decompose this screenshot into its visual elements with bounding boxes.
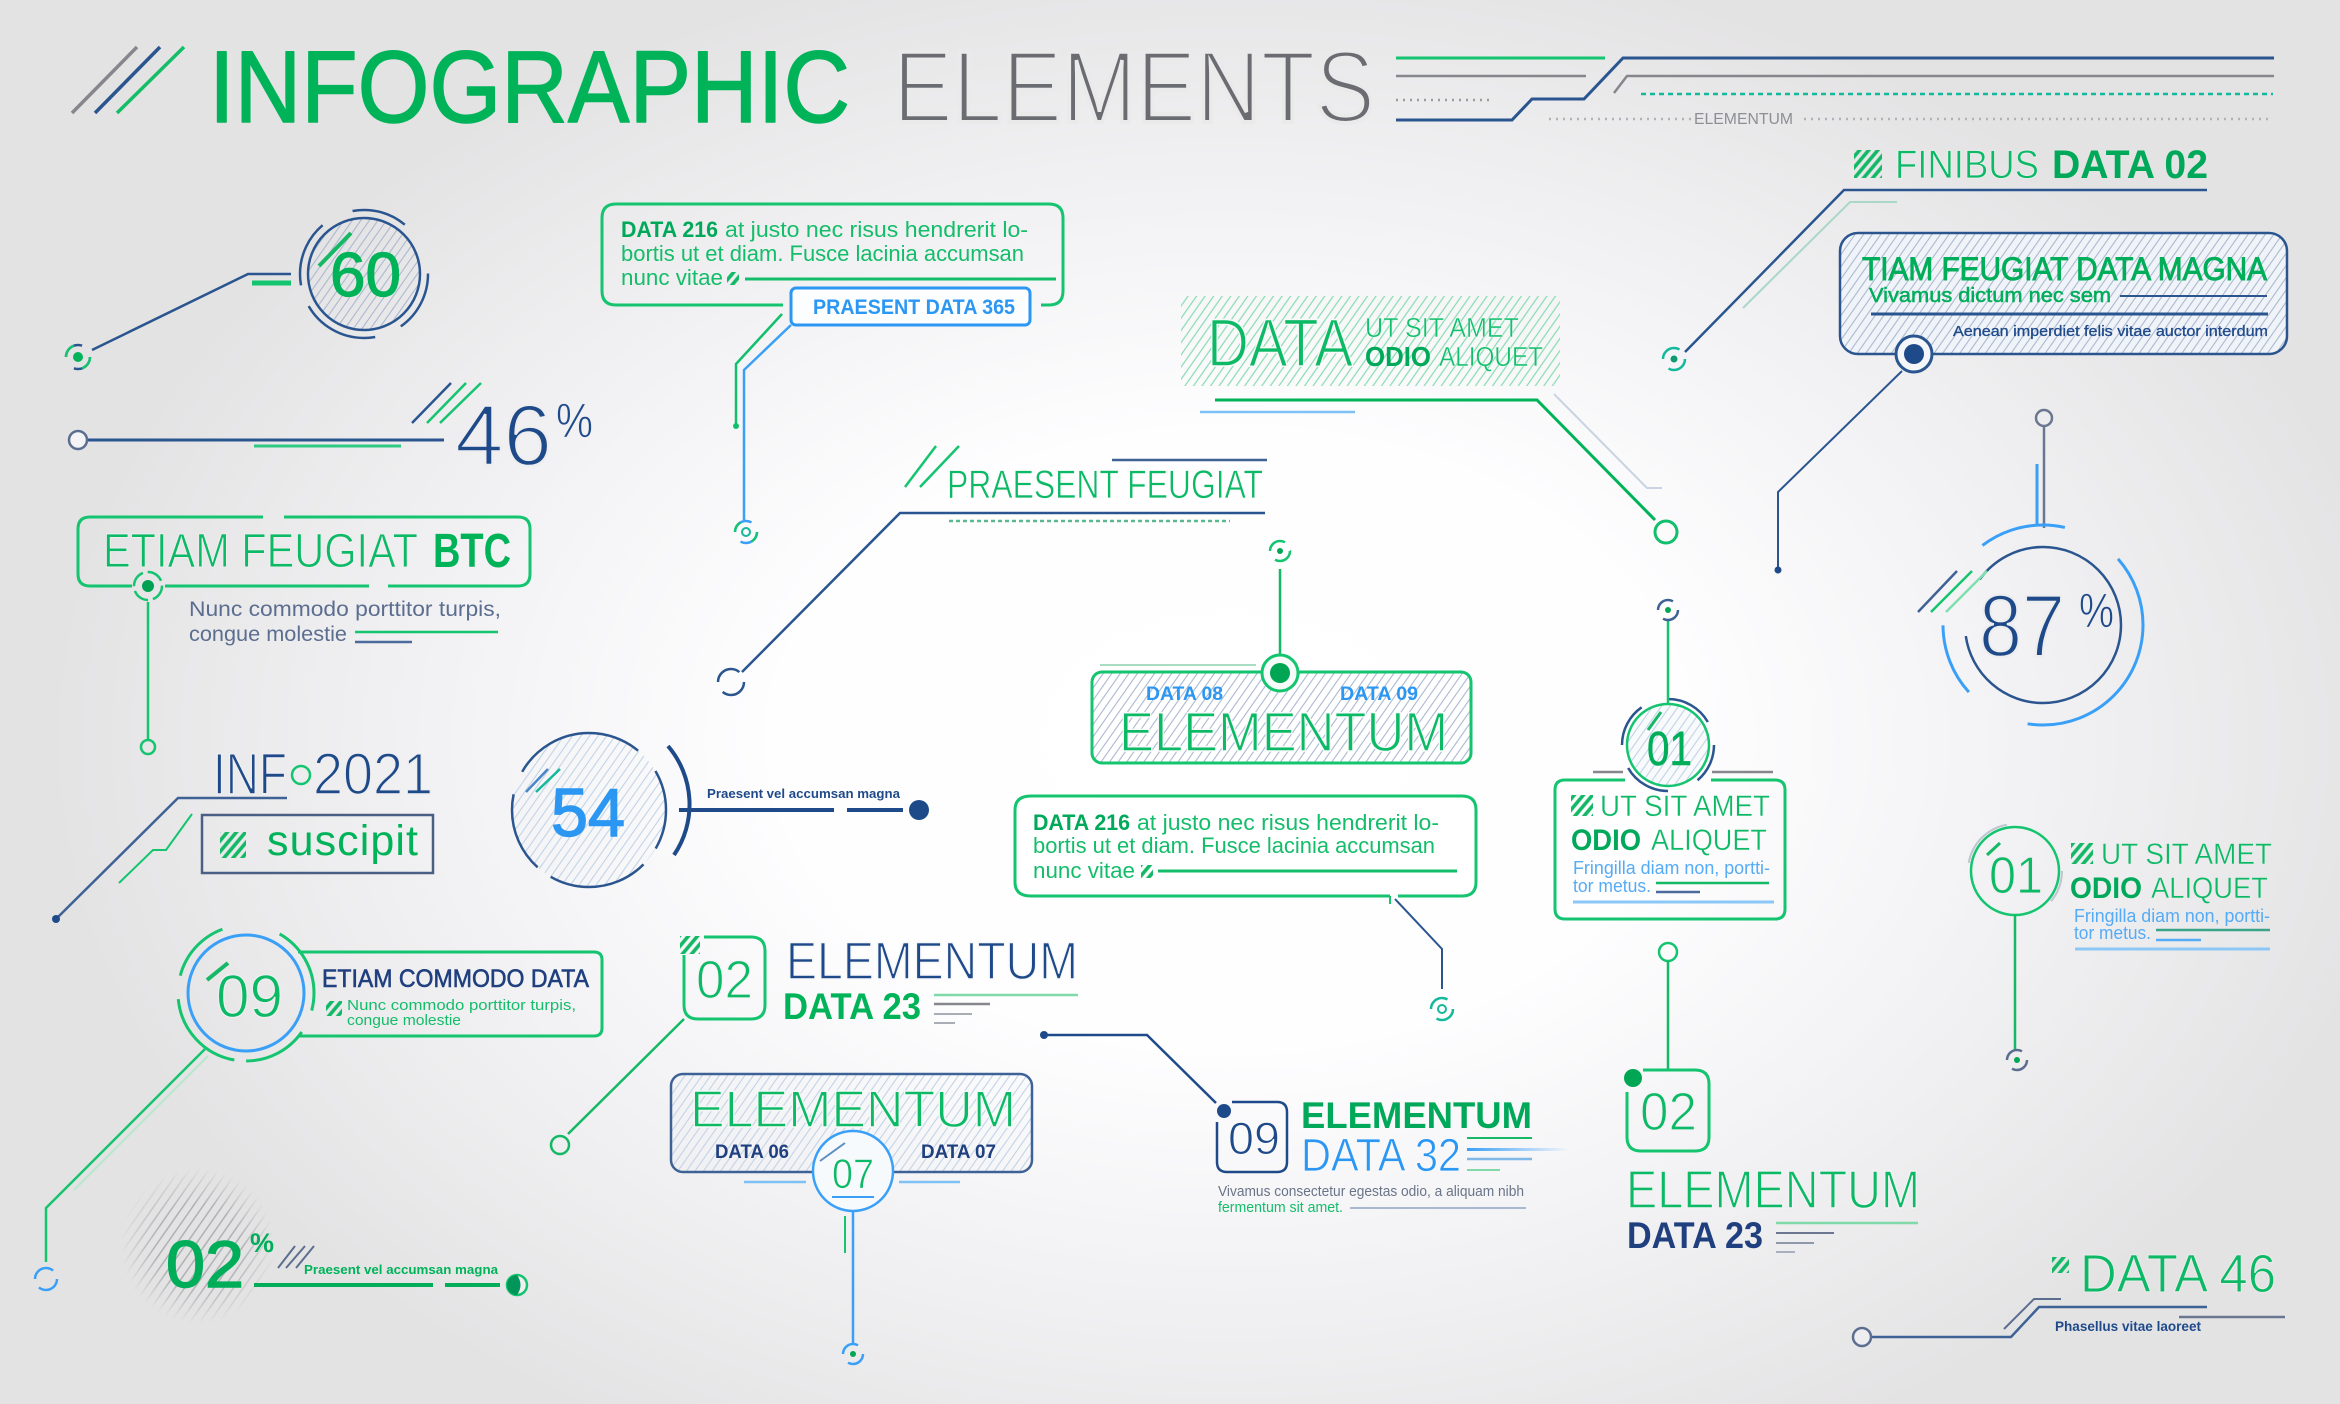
callout: inf 2021 suscipit: 2021 [313, 742, 433, 807]
header caption: ELEMENTUM [1694, 111, 1793, 128]
title: bold word: INFOGRAPHIC [209, 30, 850, 144]
callout: finibus data 02: DATA 02 [2052, 143, 2208, 187]
stat: 02 percent [120, 1168, 527, 1324]
callout: inf 2021 suscipit [52, 742, 433, 923]
stat: 54 gauge: Praesent vel accumsan magna [707, 786, 901, 801]
panel: data 216 text box: at justo nec risus hendrerit lo- [725, 217, 1028, 242]
panel: elementum data 06 07 [671, 1074, 1032, 1364]
callout: praesent feugiat [718, 446, 1267, 695]
callout: 09 elementum data 32 [1040, 1031, 1569, 1216]
panel: elementum data 06 07: 07 [832, 1150, 874, 1197]
stat: 87 percent gauge [1918, 410, 2143, 725]
stat: 46 percent [69, 383, 593, 484]
callout: 09 elementum data 32: Vivamus consectetur egestas odio, a aliquam nibh [1218, 1183, 1524, 1200]
panel: 09 etiam commodo data: 09 [216, 963, 283, 1030]
callout: 09 elementum data 32: ELEMENTUM [1301, 1095, 1532, 1136]
callout: praesent feugiat: PRAESENT FEUGIAT [947, 463, 1263, 507]
panel: tiam feugiat data magna: TIAM FEUGIAT DATA MAGNA [1862, 251, 2268, 287]
callout: 01 ut sit amet right: UT SIT AMET [2101, 838, 2272, 871]
callout: 01 ut sit amet right: Fringilla diam non, portti- [2074, 906, 2270, 926]
callout: data 46: Phasellus vitae laoreet [2055, 1318, 2201, 1334]
terminal [2007, 1050, 2027, 1070]
callout: data 46 [1853, 1244, 2285, 1346]
panel: tiam feugiat data magna: Aenean imperdiet felis vitae auctor interdum [1953, 323, 2268, 340]
panel: data hatched banner: DATA [1207, 305, 1354, 381]
panel: data 216 text box lower: nunc vitae [1033, 858, 1135, 883]
panel: data 216 text box: DATA 216 [621, 217, 718, 242]
panel: data 216 text box lower: bortis ut et diam. Fusce lacinia accumsan [1033, 833, 1435, 858]
terminal [1663, 348, 1685, 370]
panel: data 216 text box [602, 204, 1063, 543]
callout: 01 ut sit amet right [1968, 824, 2272, 1070]
callout: 01 ut sit amet right: tor metus. [2074, 923, 2151, 943]
callout: 09 elementum data 32: fermentum sit amet. [1218, 1199, 1343, 1216]
callout: 02 elementum data 23 green [1624, 943, 1920, 1256]
panel: tiam feugiat data magna [1774, 233, 2287, 574]
title: light word: ELEMENTS [893, 30, 1375, 144]
panel: data hatched banner: ODIO [1365, 341, 1431, 372]
panel: data 216 text box: bortis ut et diam. Fusce lacinia accumsan [621, 241, 1024, 266]
callout: 09 elementum data 32: 09 [1228, 1113, 1280, 1164]
callout: 01 ut sit amet right: 01 [1989, 847, 2043, 905]
stat: 54 gauge: 54 [551, 775, 625, 851]
title [72, 30, 1375, 144]
stat: 02 percent: % [250, 1228, 274, 1258]
panel: elementum data 08 09 [1092, 541, 1471, 763]
panel: 09 etiam commodo data: Nunc commodo porttitor turpis, [347, 997, 576, 1014]
callout: 02 elementum data 23 navy [551, 932, 1078, 1154]
panel: 01 ut sit amet box: 01 [1647, 723, 1692, 776]
panel: etiam feugiat BTC: ETIAM FEUGIAT [103, 525, 418, 578]
panel: elementum data 06 07: DATA 07 [921, 1142, 996, 1163]
callout: 60 gauge [66, 210, 428, 369]
callout: 60 gauge: 60 [330, 241, 401, 310]
stat: 87 percent gauge: % [2079, 585, 2114, 638]
panel: etiam feugiat BTC: Nunc commodo porttitor turpis, [189, 598, 501, 621]
panel: data 216 text box: nunc vitae [621, 265, 723, 290]
panel: etiam feugiat BTC: BTC [433, 525, 511, 578]
panel: data hatched banner: UT SIT AMET [1365, 312, 1519, 343]
callout: 01 ut sit amet right: ODIO [2070, 872, 2142, 905]
panel: 01 ut sit amet box: UT SIT AMET [1600, 790, 1770, 823]
terminal [843, 1344, 863, 1364]
panel: elementum data 08 09: ELEMENTUM [1119, 700, 1448, 763]
callout: 09 elementum data 32: DATA 32 [1301, 1129, 1461, 1181]
panel: data 216 text box lower: at justo nec risus hendrerit lo- [1137, 810, 1439, 835]
panel: data 216 text box lower: DATA 216 [1033, 810, 1130, 835]
panel: 09 etiam commodo data: ETIAM COMMODO DATA [322, 965, 589, 993]
panel: etiam feugiat BTC: congue molestie [189, 623, 347, 646]
callout: 01 ut sit amet right: ALIQUET [2151, 872, 2268, 905]
panel: elementum data 08 09: DATA 09 [1340, 684, 1418, 705]
panel: elementum data 08 09: DATA 08 [1146, 684, 1223, 705]
stat: 54 gauge [512, 733, 929, 887]
terminal [1431, 998, 1453, 1020]
callout: 02 elementum data 23 navy: ELEMENTUM [786, 932, 1078, 991]
stat: 87 percent gauge: 87 [1979, 576, 2065, 675]
callout: 02 elementum data 23 navy: 02 [696, 950, 753, 1010]
terminal [1270, 541, 1290, 561]
callout: 02 elementum data 23 green: DATA 23 [1627, 1215, 1763, 1256]
panel: 01 ut sit amet box: Fringilla diam non, portti- [1573, 858, 1770, 878]
panel: elementum data 06 07: ELEMENTUM [690, 1081, 1016, 1139]
callout: inf 2021 suscipit: suscipit [267, 817, 418, 865]
panel: 09 etiam commodo data: congue molestie [347, 1012, 461, 1029]
panel: 01 ut sit amet box: ALIQUET [1651, 824, 1767, 857]
callout: data 46: DATA 46 [2080, 1244, 2276, 1304]
blue label [791, 288, 1030, 325]
callout: inf 2021 suscipit: INF [213, 742, 287, 807]
header circuit lines [1396, 58, 2274, 128]
callout: 02 elementum data 23 green: ELEMENTUM [1626, 1160, 1920, 1220]
blue label: PRAESENT DATA 365 [813, 296, 1015, 319]
panel: 01 ut sit amet box [1555, 600, 1785, 919]
panel: data hatched banner: ALIQUET [1439, 341, 1543, 372]
callout: finibus data 02 [1663, 143, 2208, 370]
panel: elementum data 06 07: DATA 06 [715, 1142, 789, 1163]
panel: data hatched banner [1181, 296, 1677, 543]
terminal [1658, 600, 1678, 620]
callout: finibus data 02: FINIBUS [1895, 143, 2039, 187]
callout: 02 elementum data 23 navy: DATA 23 [783, 986, 921, 1027]
stat: 02 percent: 02 [166, 1227, 244, 1301]
icon: title slashes [72, 47, 184, 113]
stat: 46 percent: % [556, 395, 593, 448]
terminal [66, 345, 90, 369]
callout: 02 elementum data 23 green: 02 [1640, 1082, 1697, 1142]
stat: 02 percent: Praesent vel accumsan magna [304, 1262, 499, 1277]
terminal [735, 521, 757, 543]
stat: 46 percent: 46 [455, 388, 552, 484]
panel: 09 etiam commodo data [35, 925, 602, 1290]
panel: tiam feugiat data magna: Vivamus dictum nec sem [1869, 285, 2111, 307]
panel: data 216 text box lower [1015, 796, 1476, 1020]
panel: 01 ut sit amet box: ODIO [1571, 824, 1641, 857]
panel: 01 ut sit amet box: tor metus. [1573, 876, 1651, 896]
panel: etiam feugiat BTC [78, 517, 530, 754]
